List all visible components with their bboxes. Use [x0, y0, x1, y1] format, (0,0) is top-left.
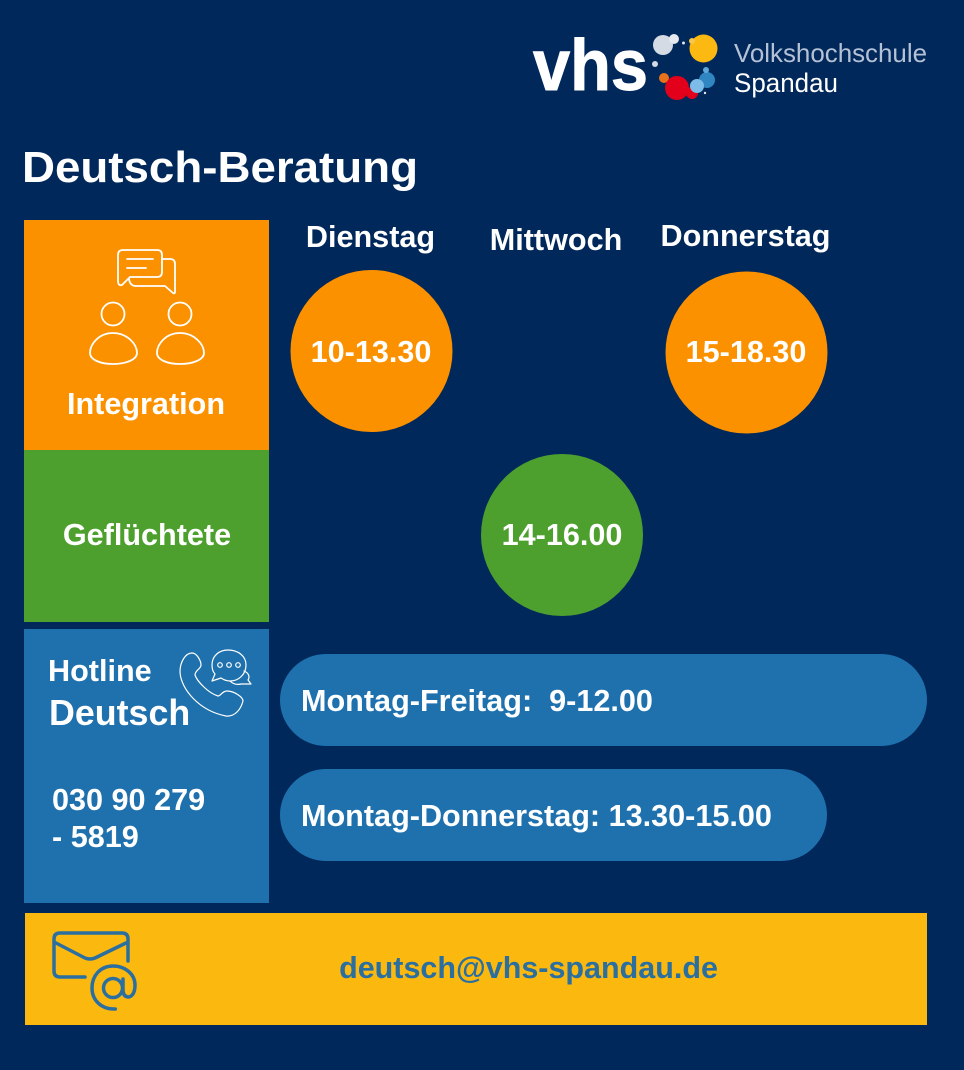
phone number: - 5819 [52, 820, 139, 854]
panel: Integration [24, 220, 269, 450]
time circle: Mittwoch Geflüchtete: 14-16.00 [502, 518, 622, 552]
time circle: Dienstag Integration [290, 270, 452, 432]
label: Hotline: Hotline [48, 654, 152, 688]
logo text line 1: Volkshochschule [734, 40, 927, 68]
panel: email bar [25, 913, 927, 1025]
time circle: Donnerstag Integration: 15-18.30 [686, 335, 806, 369]
time circle: Mittwoch Geflüchtete [481, 454, 643, 616]
icon: phone with speech bubbles [180, 650, 251, 716]
logo text line 2: Spandau [734, 68, 838, 98]
column heading: Mittwoch: Mittwoch [490, 223, 622, 257]
icon: two people talking [90, 250, 204, 364]
label: Integration: Integration [67, 387, 225, 421]
pill: Montag-Donnerstag hours [280, 769, 827, 861]
icon: envelope with at sign [54, 933, 135, 1009]
pill: Montag-Freitag hours: Montag-Freitag: 9-12.00 [301, 684, 653, 718]
logo bubbles [652, 34, 718, 100]
label: Deutsch: Deutsch [49, 693, 190, 733]
time circle: Donnerstag Integration [666, 272, 828, 434]
phone number [52, 783, 205, 854]
pill: Montag-Donnerstag hours: Montag-Donnerstag: 13.30-15.00 [301, 799, 772, 833]
column heading: Donnerstag: Donnerstag [661, 219, 830, 253]
panel: Geflüchtete [24, 450, 269, 622]
email address: deutsch@vhs-spandau.de [339, 951, 718, 985]
label: Geflüchtete: Geflüchtete [63, 518, 231, 552]
logo wordmark: vhs [533, 26, 648, 106]
panel: Hotline Deutsch [24, 629, 269, 903]
phone number: 030 90 279 [52, 783, 205, 817]
time circle: Dienstag Integration: 10-13.30 [311, 335, 431, 369]
title: Deutsch-Beratung [22, 143, 418, 192]
pill: Montag-Freitag hours [280, 654, 927, 746]
logo: vhs Volkshochschule Spandau [533, 26, 927, 106]
column heading: Dienstag: Dienstag [306, 220, 435, 254]
